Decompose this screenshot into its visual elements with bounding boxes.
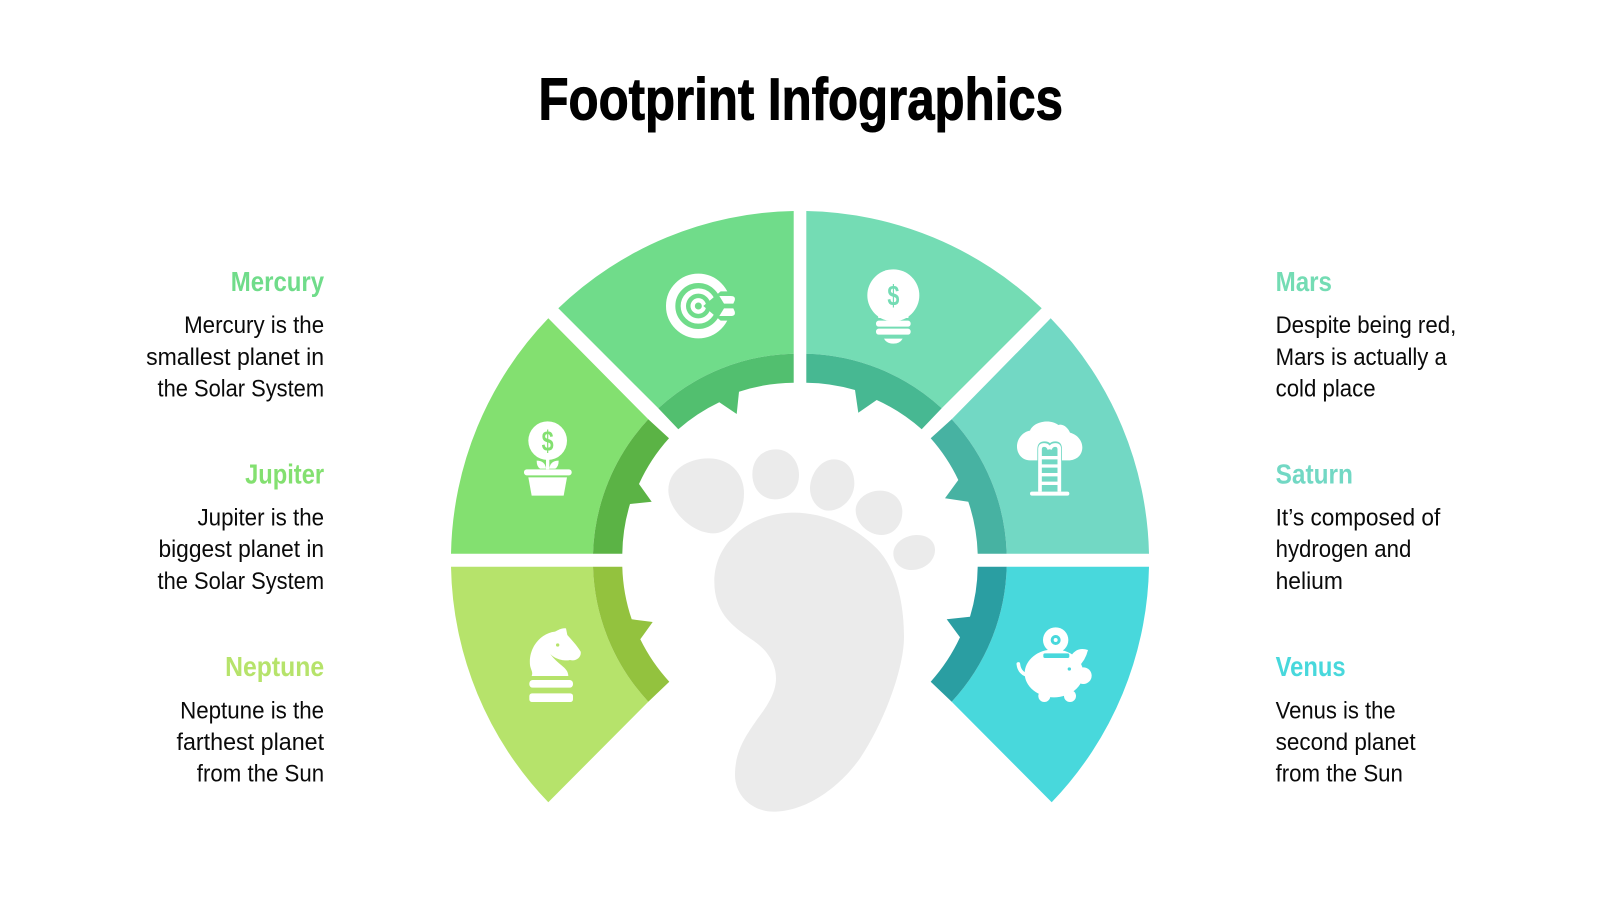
icon: target with arrow <box>671 278 740 334</box>
description: Venus <box>1276 697 1416 787</box>
text block: Mercury <box>146 266 325 402</box>
segment: Venus <box>931 567 1149 802</box>
description: Jupiter: the Solar System <box>157 568 324 595</box>
Saturn outer band <box>952 318 1149 554</box>
icon: piggy bank with coin <box>1018 627 1092 702</box>
description: Neptune: Neptune is the <box>180 697 324 724</box>
second toe <box>752 449 799 499</box>
heading: Mercury: Mercury <box>231 266 325 297</box>
icon: dollar plant <box>524 421 572 496</box>
sole <box>714 513 904 812</box>
description: Mars: cold place <box>1276 375 1376 402</box>
description: Jupiter <box>158 505 324 595</box>
description: Mars <box>1276 312 1456 402</box>
description: Venus: from the Sun <box>1276 760 1403 787</box>
Mercury inner toothed band <box>658 354 794 429</box>
description: Venus: second planet <box>1276 729 1416 756</box>
heading: Saturn: Saturn <box>1276 458 1353 490</box>
icon: chess knight <box>529 628 581 702</box>
Mercury outer band <box>558 211 794 408</box>
text block: Jupiter <box>158 458 324 595</box>
description: Saturn: It’s composed of <box>1276 505 1440 532</box>
segment: Neptune <box>451 567 669 802</box>
Mars outer band <box>806 211 1042 408</box>
heading: Venus: Venus <box>1276 651 1346 682</box>
title: Footprint Infographics <box>538 66 1063 132</box>
Venus outer band <box>952 567 1149 802</box>
description: Saturn: helium <box>1276 568 1343 595</box>
segment: Saturn <box>931 318 1149 554</box>
footprint <box>668 449 935 812</box>
text block: Neptune <box>176 651 324 787</box>
fourth toe <box>856 491 902 535</box>
icon: lightbulb with dollar <box>867 269 919 344</box>
description: Jupiter: Jupiter is the <box>197 505 324 532</box>
heading: Mars: Mars <box>1276 266 1332 297</box>
Jupiter outer band <box>451 318 648 554</box>
text block: Venus <box>1276 651 1416 787</box>
segment: Mercury <box>558 211 794 429</box>
description: Neptune <box>176 697 324 787</box>
description: Mercury: smallest planet in <box>146 344 324 371</box>
description: Jupiter: biggest planet in <box>158 536 324 563</box>
description: Mercury: the Solar System <box>157 375 324 402</box>
description: Saturn <box>1276 505 1440 595</box>
Jupiter inner toothed band <box>593 419 669 554</box>
description: Saturn: hydrogen and <box>1276 536 1411 563</box>
text block: Mars <box>1276 266 1456 402</box>
third toe <box>810 459 854 511</box>
Neptune inner toothed band <box>593 567 669 702</box>
segment: Jupiter <box>451 318 669 554</box>
description: Venus: Venus is the <box>1276 697 1396 724</box>
description: Mars: Despite being red, <box>1276 312 1456 339</box>
Venus inner toothed band <box>931 567 1007 702</box>
description: Mercury <box>146 312 324 402</box>
big toe <box>668 458 744 533</box>
description: Neptune: from the Sun <box>197 760 324 787</box>
Mars inner toothed band <box>806 354 942 429</box>
description: Neptune: farthest planet <box>176 729 324 756</box>
little toe <box>893 535 935 570</box>
description: Mercury: Mercury is the <box>184 312 324 339</box>
icon: cloud and ladder <box>1017 421 1082 496</box>
Saturn inner toothed band <box>931 419 1007 554</box>
text block: Saturn <box>1276 458 1440 595</box>
heading: Neptune: Neptune <box>225 651 324 682</box>
heading: Jupiter: Jupiter <box>245 458 324 490</box>
icon: lightbulb with dollar: $ <box>887 280 899 312</box>
icon: dollar plant: $ <box>542 426 554 458</box>
segment: Mars <box>806 211 1042 429</box>
Neptune outer band <box>451 567 648 802</box>
description: Mars: Mars is actually a <box>1276 344 1447 371</box>
